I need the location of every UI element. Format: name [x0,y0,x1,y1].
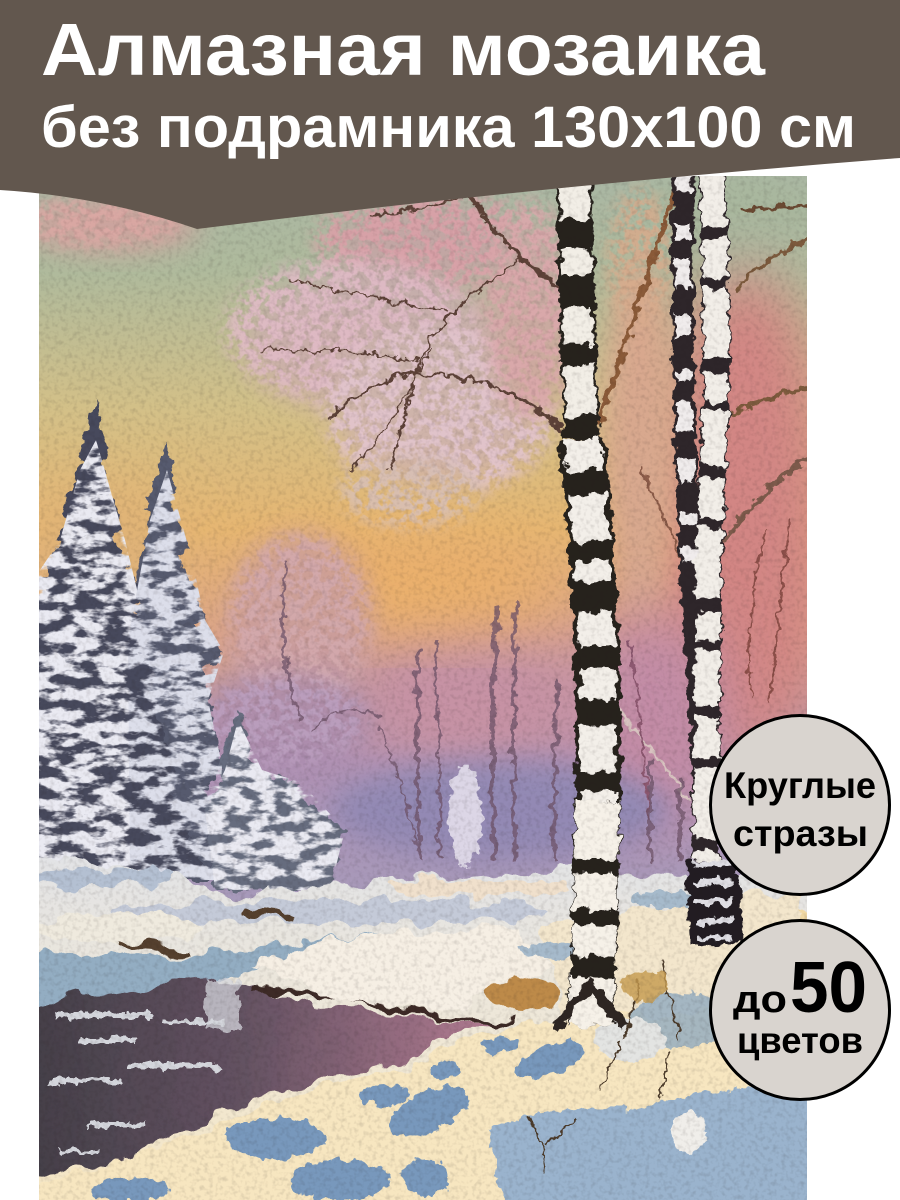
header banner [0,0,900,229]
snowy bushes and grasses [530,960,706,1172]
snow ground [39,854,807,1184]
sky [39,176,807,902]
birch tree: right pair [683,170,716,945]
spruce: dark bodies [20,398,345,890]
distant forest trunks [282,560,680,860]
badge: up to 50 colours: 50 [790,948,867,1028]
painting: winter forest at sunset [39,176,807,1200]
floating ice pieces [50,980,239,1153]
badge: up to 50 colours: до [733,979,787,1021]
badge: round rhinestones [710,716,890,894]
speckled frosted foliage [20,190,672,765]
title: Алмазная мозаика [41,8,766,91]
badge: up to 50 colours [710,920,890,1100]
stream pond [0,912,510,1185]
blue snow shadows [90,892,880,1200]
badge: round rhinestones: Круглые [724,765,876,806]
soft pink foliage base [200,205,570,770]
birch tree: main trunk [555,170,625,1028]
badge: up to 50 colours: цветов [737,1020,863,1061]
small snowy pine in distance [449,763,481,867]
foreground snow [90,888,802,1173]
canvas grain [39,176,807,1200]
subtitle: без подрамника 130х100 см [41,95,856,160]
spruce trees [20,398,345,890]
thin branches [260,190,807,820]
spruce: snow clumps [20,440,345,890]
badge: round rhinestones: стразы [733,813,868,854]
